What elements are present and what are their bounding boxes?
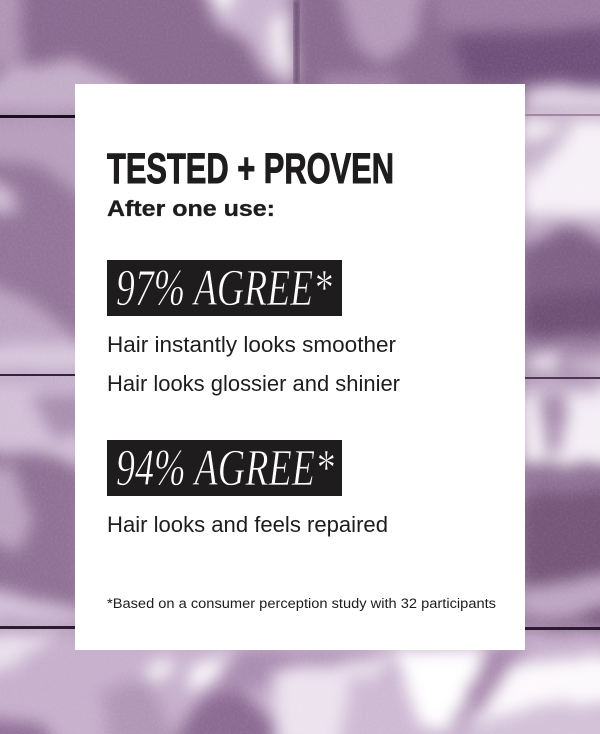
badge: 94% agree: 94% AGREE* [116, 440, 334, 497]
claim: repaired: Hair looks and feels repaired [107, 512, 388, 537]
quilting seams [0, 114, 600, 630]
footnote: *Based on a consumer perception study with 32 participants [107, 596, 496, 611]
left column upper [0, 118, 80, 373]
right column upper [520, 118, 600, 373]
bottom band [0, 632, 600, 734]
claim: glossier: Hair looks glossier and shinier [107, 371, 400, 396]
right column lower [520, 381, 600, 626]
top band [0, 0, 600, 110]
claim: smoother: Hair instantly looks smoother [107, 332, 396, 357]
centre fold [294, 0, 299, 84]
panel: white results card [75, 84, 525, 650]
heading: TESTED + PROVEN [107, 145, 394, 193]
badge: 97% agree: 97% AGREE* [116, 260, 332, 317]
subheading: After one use: [107, 196, 275, 221]
left column lower [0, 378, 80, 623]
